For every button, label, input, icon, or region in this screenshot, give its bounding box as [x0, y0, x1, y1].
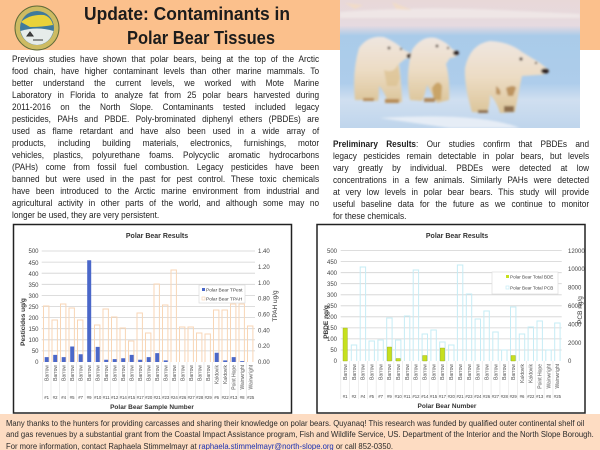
sample location labels: Barrow — [476, 364, 482, 380]
sample location labels: Barrow — [449, 364, 455, 380]
legend: Polar Bear TPAH — [206, 296, 243, 302]
text block: preliminary results: vary greatly by individual. PBDEs were detected at low — [332, 162, 589, 172]
right axis ticks: 4000 — [568, 322, 582, 328]
right axis ticks: 10000 — [568, 267, 585, 273]
right axis ticks: 1.00 — [258, 281, 270, 287]
legend — [492, 272, 558, 294]
legend: Polar Bear Total BDE — [510, 274, 553, 280]
sample location labels: Wainwright — [248, 364, 254, 390]
left axis ticks: 50 — [32, 349, 39, 355]
sample location labels: Barrow — [378, 364, 384, 380]
left axis ticks — [28, 249, 39, 366]
sample location labels: Barrow — [396, 364, 402, 380]
text block: preliminary results: at very low levels in polar bear bears. This study will provide — [332, 186, 589, 196]
left axis ticks: 400 — [28, 272, 39, 278]
sample location labels: Barrow — [484, 364, 490, 380]
left axis ticks: 300 — [327, 293, 338, 299]
text block: background: pesticides, PAHs and PBDE. Poly-brominated diphenyl ethers (PBDEs) are — [12, 113, 319, 124]
sample location labels: Barrow — [458, 364, 464, 380]
left axis ticks: 350 — [28, 283, 39, 289]
right axis ticks — [258, 249, 270, 366]
right axis ticks: 6000 — [568, 304, 582, 310]
sample numbers: #24 — [171, 395, 178, 400]
sample location labels: Barrow — [96, 365, 102, 381]
sample location labels: Barrow — [121, 365, 127, 381]
bear 2 — [408, 38, 459, 103]
left axis ticks: 100 — [327, 337, 338, 343]
TPest blue bars — [45, 260, 244, 362]
axis titles: Polar Bear Number — [418, 403, 477, 410]
sample location labels — [44, 364, 254, 390]
right axis ticks — [568, 249, 585, 365]
sample numbers — [343, 394, 562, 399]
sample numbers: #2 — [352, 394, 357, 399]
sample numbers: #22 — [222, 395, 229, 400]
sample location labels: Point Hope — [538, 364, 544, 389]
sample numbers: #8 — [240, 395, 245, 400]
text block: preliminary results: for these chemicals. — [332, 210, 406, 220]
sample numbers: #13 — [536, 394, 544, 399]
title — [84, 4, 290, 48]
sample numbers: #21 — [457, 394, 464, 399]
right axis ticks: 0.80 — [258, 296, 270, 302]
left axis ticks: 100 — [28, 338, 39, 344]
text block: background: used as flame retardant and have also been used in a wide array of — [12, 125, 319, 136]
left axis ticks: 150 — [327, 326, 338, 332]
sample location labels: Barrow — [138, 365, 144, 381]
sample numbers: #17 — [137, 395, 144, 400]
sample numbers — [44, 395, 255, 400]
sample numbers: #28 — [196, 395, 204, 400]
sample location labels: Wainwright — [240, 364, 246, 390]
sample numbers: #27 — [188, 395, 195, 400]
text block: background: better understand the current levels, we worked with Mote Marine — [12, 77, 319, 88]
text block: background: vehicles, plastics, polyurethane foams. Polycyclic aromatic hydrocarbons — [12, 149, 319, 160]
right axis ticks: 0.60 — [258, 312, 270, 318]
sample location labels: Kaktovik — [223, 365, 229, 384]
sample numbers: #9 — [87, 395, 92, 400]
header band — [0, 0, 600, 50]
right axis ticks: 0.40 — [258, 328, 270, 334]
sample numbers: #4 — [361, 394, 366, 399]
sample location labels: Barrow — [70, 365, 76, 381]
photo: three polar bears on sea ice — [340, 0, 580, 128]
sample numbers: #23 — [162, 395, 170, 400]
left axis ticks: 0 — [35, 360, 39, 366]
text block: preliminary results: Preliminary Results: Our studies confirm that PBDEs and — [332, 138, 589, 148]
title: Polar Bear Tissues — [127, 28, 275, 48]
axis titles — [323, 296, 584, 410]
sample location labels: Kaktovik — [214, 365, 220, 384]
text block: background: have been introduced to the Arctic marine environment from industrial and — [12, 185, 319, 196]
right axis ticks: 0.20 — [258, 344, 270, 350]
sample location labels: Barrow — [440, 364, 446, 380]
sample numbers: #6 — [214, 395, 220, 400]
sample location labels: Barrow — [343, 364, 349, 380]
sample location labels: Barrow — [172, 365, 178, 381]
left axis ticks: 350 — [327, 282, 338, 288]
sample numbers: #14 — [120, 395, 127, 400]
sample location labels: Wainwright — [546, 363, 552, 389]
sample location labels: Barrow — [431, 364, 437, 380]
right axis ticks: 0 — [568, 359, 572, 365]
text block: background: 2011-2016 on the North Slope. Contaminants tested included legacy — [12, 101, 319, 112]
left axis ticks: 250 — [28, 305, 39, 311]
sample numbers: #10 — [395, 394, 402, 399]
icon: North Slope Borough seal — [14, 6, 60, 50]
legend — [199, 285, 245, 303]
bear 1 — [354, 37, 413, 103]
sample location labels: Barrow — [405, 364, 411, 380]
left axis ticks: 200 — [28, 316, 39, 322]
left axis ticks: 450 — [327, 260, 338, 266]
sample location labels: Barrow — [62, 365, 68, 381]
chart: pesticides and PAH by sample: Polar Bear Results — [126, 233, 188, 240]
sample location labels — [343, 363, 561, 389]
sample location labels: Barrow — [198, 365, 204, 381]
sample numbers: #25 — [247, 395, 255, 400]
sample numbers: #29 — [510, 394, 517, 399]
sample numbers: #5 — [369, 394, 375, 399]
text block: background: agricultural activity in other parts of the world, and although some may no — [12, 197, 319, 208]
text block: preliminary results: legacy pesticides remain detectable in polar bears, but levels — [332, 150, 589, 160]
left axis ticks: 450 — [28, 261, 39, 267]
sample location labels: Barrow — [180, 365, 186, 381]
axis titles: Pesticides ug/g — [20, 298, 27, 346]
left axis ticks: 400 — [327, 271, 338, 277]
sample numbers: #27 — [492, 394, 500, 399]
text block: background — [12, 53, 320, 220]
sample location labels: Barrow — [112, 365, 118, 381]
left axis ticks: 250 — [327, 304, 338, 310]
PBDE yellow bars — [343, 328, 515, 361]
text block: background: banned but were used in the past for pest control. These toxic chemicals — [12, 173, 319, 184]
sample location labels: Barrow — [164, 365, 170, 381]
sample numbers: #21 — [154, 395, 161, 400]
sample location labels: Point Hope — [232, 365, 238, 390]
sample location labels: Barrow — [78, 365, 84, 381]
sample location labels: Barrow — [189, 365, 195, 381]
text block: preliminary results: concentrations in a few animals. Similarly PAHs were detected — [332, 174, 589, 184]
sample numbers: #4 — [61, 395, 67, 400]
left axis ticks: 300 — [28, 294, 39, 300]
sample numbers: #22 — [527, 394, 535, 399]
left axis ticks: 500 — [327, 249, 338, 255]
legend: Polar Bear TPest — [206, 288, 243, 294]
bottom credits band — [0, 414, 600, 450]
sample numbers: #12 — [111, 395, 119, 400]
chart: PBDE and PCB by sample: Polar Bear Results — [426, 233, 488, 240]
sample location labels: Barrow — [104, 365, 110, 381]
sample location labels: Barrow — [502, 364, 508, 380]
right axis ticks: 12000 — [568, 249, 585, 255]
sample location labels: Barrow — [467, 364, 473, 380]
sample location labels: Barrow — [370, 364, 376, 380]
text block: acknowledgements: and gas revenues by a substantial grant from the Coastal Impact Assistance program, Fish and Wildlife Service, US. Department of the Interior and the North Slope Borough. — [6, 429, 594, 439]
sample location labels: Barrow — [423, 364, 429, 380]
sample numbers: #11 — [404, 394, 411, 399]
right axis ticks: 2000 — [568, 341, 582, 347]
sample location labels: Kaktovik — [529, 364, 535, 383]
sample numbers: #17 — [439, 394, 447, 399]
left axis ticks — [327, 249, 338, 365]
sample location labels: Barrow — [87, 365, 93, 381]
sample numbers: #15 — [430, 394, 438, 399]
sample numbers: #23 — [465, 394, 473, 399]
sample numbers: #28 — [501, 394, 508, 399]
sample numbers: #26 — [179, 395, 187, 400]
sample numbers: #8 — [546, 394, 551, 399]
sample numbers: #6 — [520, 394, 525, 399]
axis titles: TPAH ug/g — [272, 290, 279, 322]
text block: background: products, including building materials, electronics, furnishings, motor — [12, 137, 319, 148]
text block: background: food chain, have higher contaminant levels than other marine mammals. To — [12, 65, 319, 76]
sample location labels: Barrow — [414, 364, 420, 380]
left axis ticks: 50 — [330, 348, 338, 354]
legend: Polar Bear Total PCB — [510, 286, 553, 290]
axis titles: PCB ng/g — [577, 296, 584, 324]
text block: background: (PAHs) come from fossil fuel combustion. Legacy pesticides have been — [12, 161, 319, 172]
right axis ticks: 1.20 — [258, 265, 270, 271]
sample numbers: #7 — [78, 395, 84, 400]
text block: acknowledgements: Many thanks to the hunters for providing carcasses and sharing their knowledge on polar bears. Quyanaq! This research was funded by qualified outer continental shelf oil — [6, 418, 584, 428]
sample location labels: Barrow — [206, 365, 212, 381]
axis titles: Polar Bear Sample Number — [110, 404, 194, 411]
text block: preliminary results — [332, 138, 590, 220]
sample numbers: #2 — [53, 395, 58, 400]
left axis ticks: 0 — [334, 359, 338, 365]
bear 3 — [465, 41, 549, 113]
sample numbers: #11 — [103, 395, 110, 400]
left axis ticks: 500 — [28, 249, 39, 255]
sample location labels: Wainwright — [555, 363, 561, 389]
sample numbers: #13 — [230, 395, 238, 400]
sample numbers: #14 — [421, 394, 429, 399]
sample numbers: #1 — [44, 395, 50, 400]
sample numbers: #15 — [128, 395, 136, 400]
TPAH outline bars — [44, 270, 253, 362]
sample location labels: Barrow — [44, 365, 50, 381]
text block: acknowledgements — [6, 418, 594, 450]
sample numbers: #20 — [448, 394, 455, 399]
sample numbers: #12 — [412, 394, 420, 399]
title: Update: Contaminants in — [84, 4, 290, 24]
sample location labels: Barrow — [130, 365, 136, 381]
sample numbers: #9 — [387, 394, 392, 399]
right axis ticks: 8000 — [568, 286, 582, 292]
PCB outline bars — [351, 265, 560, 361]
right axis ticks: 0.00 — [258, 360, 270, 366]
sample numbers: #20 — [145, 395, 153, 400]
sample numbers: #29 — [205, 395, 212, 400]
text block: preliminary results: useful baseline data for the future as we continue to monitor — [332, 198, 589, 208]
sample location labels: Barrow — [361, 364, 367, 380]
left axis ticks: 150 — [28, 327, 39, 333]
sample location labels: Barrow — [155, 365, 161, 381]
sample numbers: #5 — [70, 395, 75, 400]
axis titles: PBDE ng/g — [323, 305, 330, 339]
axis titles — [20, 290, 279, 411]
text block: background: Laboratory in Florida to analyze fat from 25 polar bears harvested during — [12, 89, 319, 100]
sample numbers: #24 — [474, 394, 482, 399]
right axis ticks: 1.40 — [258, 249, 270, 255]
left axis ticks: 200 — [327, 315, 338, 321]
sample numbers: #7 — [378, 394, 384, 399]
sample location labels: Barrow — [511, 364, 517, 380]
sample numbers: #26 — [483, 394, 491, 399]
sample location labels: Barrow — [387, 364, 393, 380]
sample location labels: Barrow — [146, 365, 152, 381]
sample numbers: #10 — [94, 395, 102, 400]
sample numbers: #25 — [554, 394, 562, 399]
sample location labels: Kaktovik — [520, 364, 526, 383]
sample numbers: #1 — [343, 394, 348, 399]
sample location labels: Barrow — [352, 364, 358, 380]
sample location labels: Barrow — [493, 364, 499, 380]
text block: background: longer be used, they are very persistent. — [12, 209, 159, 220]
text block: background: Previous studies have shown that polar bears, being at the top of the Arctic — [12, 53, 319, 64]
sample location labels: Barrow — [53, 365, 59, 381]
